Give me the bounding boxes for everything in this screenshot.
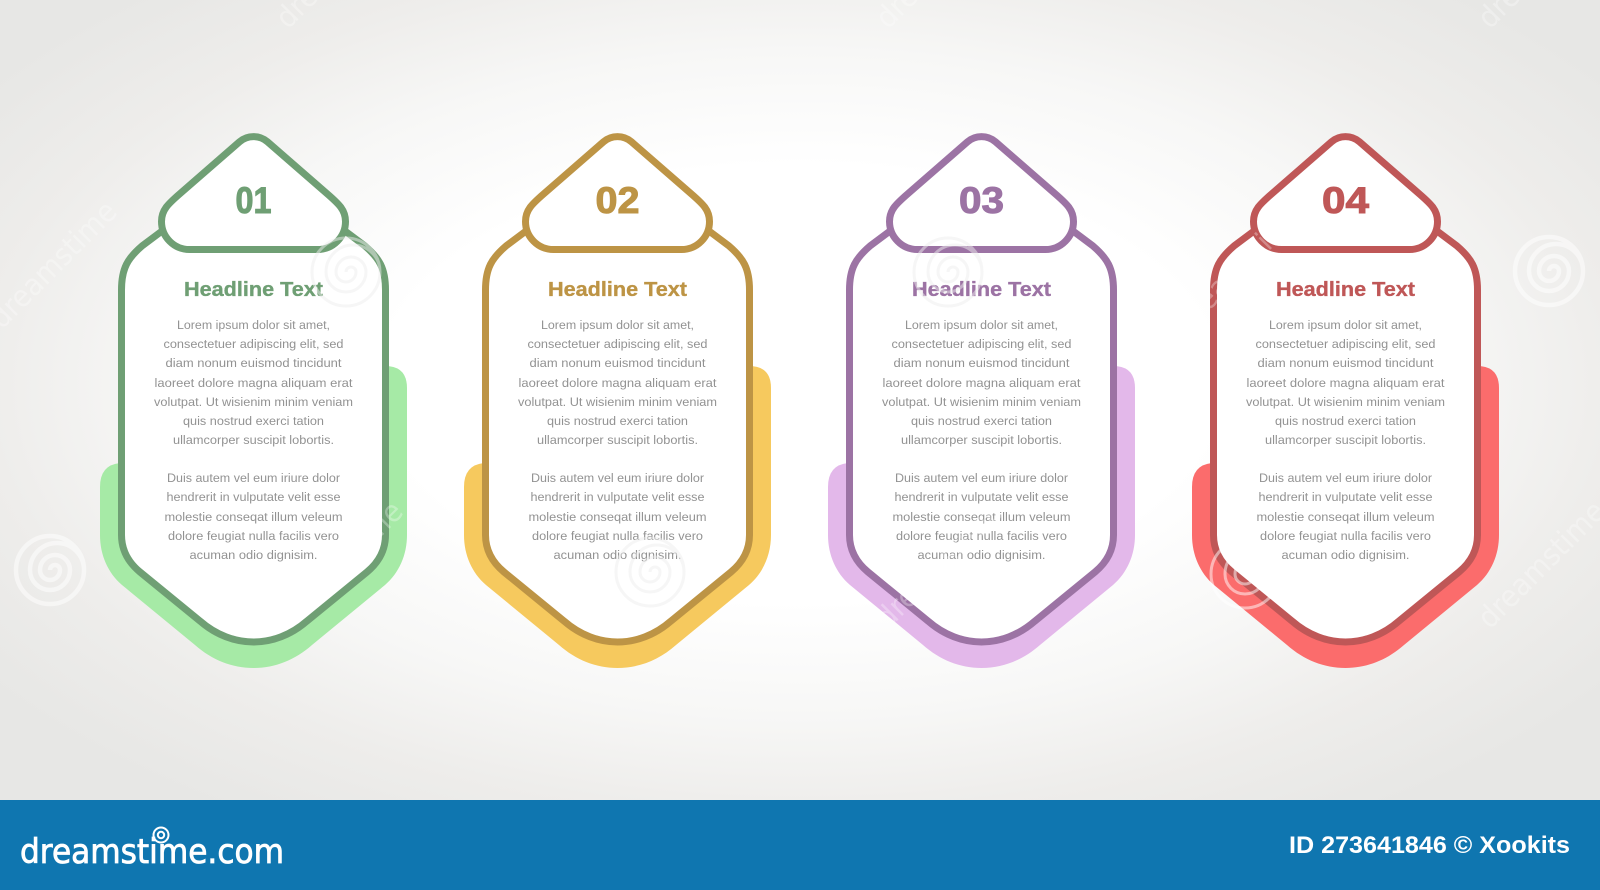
number 01: 01 <box>236 180 272 221</box>
body text: hendrerit in vulputate velit esse <box>894 490 1069 504</box>
body text: consectetuer adipiscing elit, sed <box>164 337 344 351</box>
number badge <box>1254 137 1438 250</box>
body text: dolore feugiat nulla facilis vero <box>1260 529 1431 543</box>
body text: Lorem ipsum dolor sit amet, <box>905 318 1058 332</box>
watermark text: dreamstime <box>269 494 410 636</box>
body text: Lorem ipsum dolor sit amet, <box>541 318 694 332</box>
panel: step 01 <box>100 137 407 668</box>
body text: hendrerit in vulputate velit esse <box>530 490 705 504</box>
body text: consectetuer adipiscing elit, sed <box>1256 337 1436 351</box>
body text: Duis autem vel eum iriure dolor <box>1259 471 1432 485</box>
body text: ullamcorper suscipit lobortis. <box>173 433 334 447</box>
card outline <box>1214 231 1478 642</box>
body text: quis nostrud exerci tation <box>547 414 688 428</box>
body text: dolore feugiat nulla facilis vero <box>168 529 339 543</box>
logo text: dreamstime.com <box>20 832 284 872</box>
body text: Lorem ipsum dolor sit amet, <box>1269 318 1422 332</box>
body text: ullamcorper suscipit lobortis. <box>1265 433 1426 447</box>
number badge <box>526 137 710 250</box>
body text: diam nonum euismod tincidunt <box>1258 356 1434 370</box>
number 02: 02 <box>596 180 640 221</box>
gold offset shadow shape <box>464 366 771 668</box>
headline: Headline Text <box>1276 279 1415 301</box>
watermark text <box>0 0 1600 636</box>
number 03: 03 <box>959 180 1004 221</box>
body text <box>882 318 1081 562</box>
body text: dolore feugiat nulla facilis vero <box>532 529 703 543</box>
headline: Headline Text <box>548 279 687 301</box>
red offset shadow shape <box>1192 366 1499 668</box>
body text <box>518 318 717 562</box>
body text: acuman odio dignisim. <box>1282 548 1410 562</box>
body text: hendrerit in vulputate velit esse <box>166 490 341 504</box>
body text: dolore feugiat nulla facilis vero <box>896 529 1067 543</box>
body text: laoreet dolore magna aliquam erat <box>518 376 717 390</box>
body text: quis nostrud exerci tation <box>1275 414 1416 428</box>
watermark text: dreamstime <box>1169 196 1310 338</box>
panel: step 03 <box>828 137 1135 668</box>
body text: quis nostrud exerci tation <box>911 414 1052 428</box>
body text: molestie conseqat illum veleum <box>164 510 342 524</box>
card outline <box>850 231 1114 642</box>
green offset shadow shape <box>100 366 407 668</box>
icon: logo swirl <box>154 828 168 842</box>
panel: step 04 <box>1192 137 1499 668</box>
body text: consectetuer adipiscing elit, sed <box>892 337 1072 351</box>
body text: acuman odio dignisim. <box>918 548 1046 562</box>
body text: diam nonum euismod tincidunt <box>166 356 342 370</box>
card outline <box>122 231 386 642</box>
body text: volutpat. Ut wisienim minim veniam <box>154 395 353 409</box>
number 04: 04 <box>1322 180 1369 221</box>
body text: ullamcorper suscipit lobortis. <box>537 433 698 447</box>
body text: molestie conseqat illum veleum <box>1256 510 1434 524</box>
headline: Headline Text <box>912 279 1051 301</box>
body text: acuman odio dignisim. <box>554 548 682 562</box>
body text: diam nonum euismod tincidunt <box>530 356 706 370</box>
body text: molestie conseqat illum veleum <box>892 510 1070 524</box>
body text: hendrerit in vulputate velit esse <box>1258 490 1433 504</box>
body text: laoreet dolore magna aliquam erat <box>1246 376 1445 390</box>
number badge <box>890 137 1074 250</box>
watermark text: dreamstime <box>869 494 1010 636</box>
image id and credit: ID 273641846 © Xookits <box>1289 832 1570 859</box>
body text: ullamcorper suscipit lobortis. <box>901 433 1062 447</box>
body text: laoreet dolore magna aliquam erat <box>882 376 1081 390</box>
number badge <box>162 137 346 250</box>
body text: quis nostrud exerci tation <box>183 414 324 428</box>
body text: Duis autem vel eum iriure dolor <box>895 471 1068 485</box>
body text: Duis autem vel eum iriure dolor <box>531 471 704 485</box>
footer bar <box>0 800 1600 890</box>
panel: step 02 <box>464 137 771 668</box>
body text: diam nonum euismod tincidunt <box>894 356 1070 370</box>
card outline <box>486 231 750 642</box>
body text <box>154 318 353 562</box>
body text: laoreet dolore magna aliquam erat <box>154 376 353 390</box>
body text: volutpat. Ut wisienim minim veniam <box>1246 395 1445 409</box>
body text: volutpat. Ut wisienim minim veniam <box>518 395 717 409</box>
body text: Duis autem vel eum iriure dolor <box>167 471 340 485</box>
watermark swirls <box>16 237 1583 608</box>
body text: molestie conseqat illum veleum <box>528 510 706 524</box>
body text: acuman odio dignisim. <box>190 548 318 562</box>
body text: Lorem ipsum dolor sit amet, <box>177 318 330 332</box>
purple offset shadow shape <box>828 366 1135 668</box>
body text: volutpat. Ut wisienim minim veniam <box>882 395 1081 409</box>
headline: Headline Text <box>184 279 323 301</box>
body text: consectetuer adipiscing elit, sed <box>528 337 708 351</box>
body text <box>1246 318 1445 562</box>
